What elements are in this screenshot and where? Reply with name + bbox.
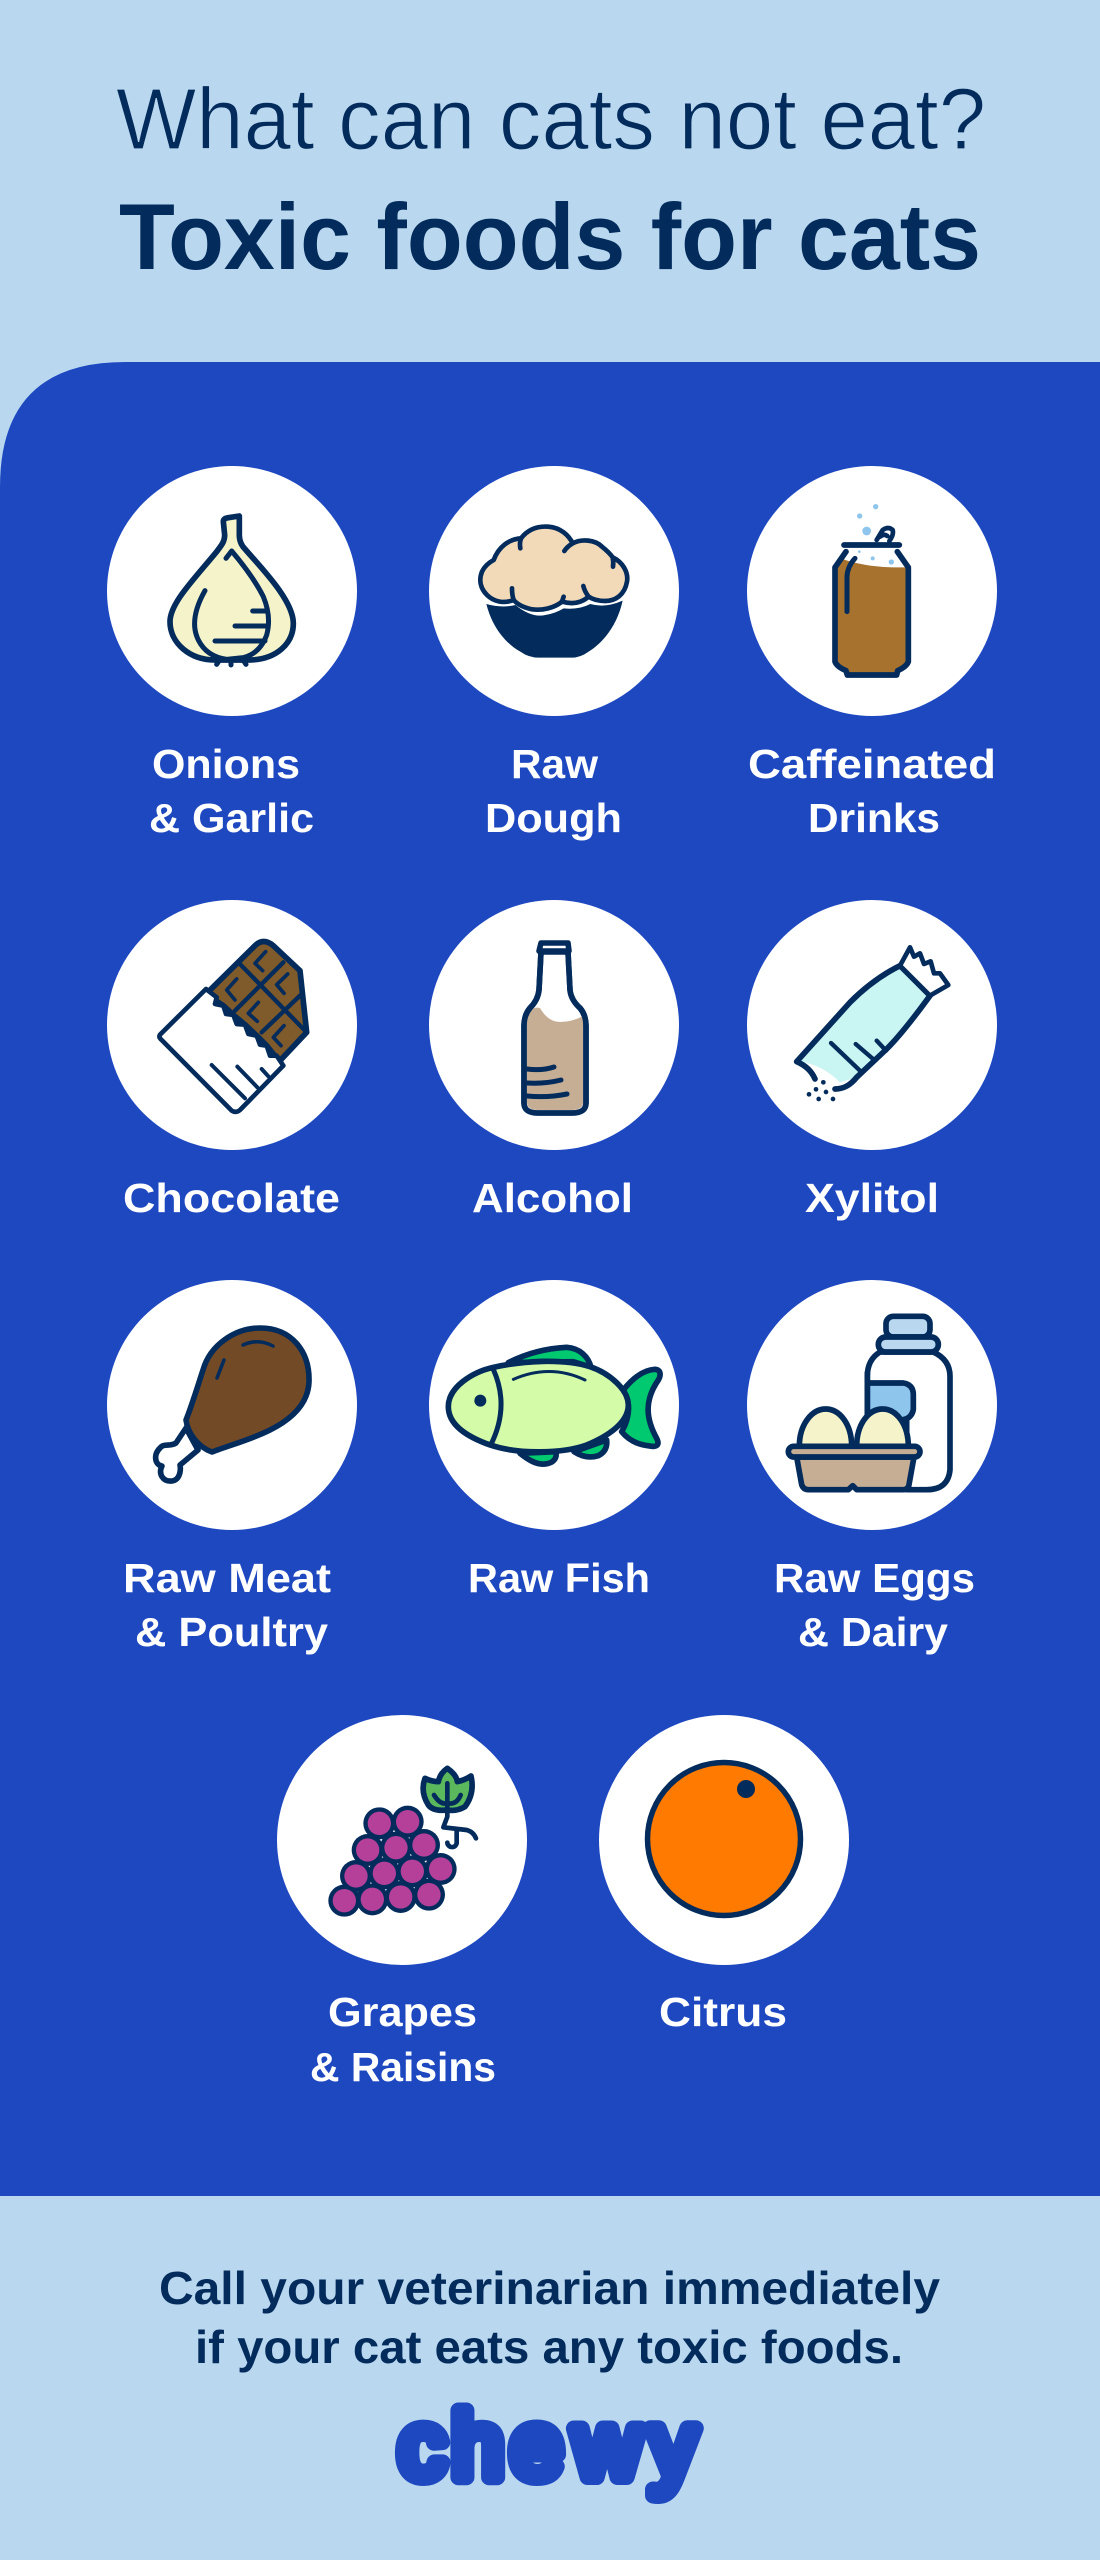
label: Raw Dough: Dough — [485, 795, 622, 841]
label: Citrus: Citrus — [659, 1989, 787, 2035]
label: Chocolate: Chocolate — [123, 1175, 340, 1221]
item: raw dough — [429, 466, 679, 841]
label: Onions & Garlic — [149, 741, 314, 841]
item: raw meat and poultry — [107, 1280, 357, 1655]
item: raw fish — [429, 1280, 679, 1601]
label: Grapes & Raisins — [310, 1989, 496, 2090]
icon: eggs and milk bottle — [788, 1316, 950, 1490]
title: What can cats not eat? — [116, 71, 986, 168]
callout: call your veterinarian: if your cat eats any toxic foods. — [195, 2321, 903, 2373]
label: Raw Eggs & Dairy: Raw Eggs — [774, 1555, 975, 1601]
panel: toxic foods — [0, 362, 1100, 2196]
item: raw eggs and dairy — [747, 1280, 997, 1655]
item: xylitol — [747, 900, 997, 1221]
label: Caffeinated Drinks — [748, 741, 996, 841]
item: alcohol — [429, 900, 679, 1221]
icon: chicken drumstick — [156, 1328, 309, 1481]
label: Raw Meat & Poultry — [123, 1555, 331, 1655]
icon: dough in bowl — [480, 527, 627, 658]
callout: call your veterinarian — [159, 2262, 940, 2373]
icon: soda can — [835, 504, 908, 675]
label: Raw Eggs & Dairy: & Dairy — [798, 1609, 948, 1655]
item: grapes and raisins — [277, 1715, 527, 2090]
label: Onions & Garlic: Onions — [152, 741, 300, 787]
title: Toxic foods for cats — [119, 184, 981, 289]
icon: grapes — [328, 1768, 476, 1917]
item: onions and garlic — [107, 466, 357, 841]
label: Raw Dough: Raw — [511, 741, 598, 787]
callout: call your veterinarian: Call your veterinarian immediately — [159, 2262, 940, 2314]
icon: beer bottle — [524, 943, 586, 1113]
item: caffeinated drinks — [747, 466, 997, 841]
logo: chewy: chewy — [399, 2395, 696, 2497]
icon: orange — [648, 1762, 800, 1916]
item: chocolate — [107, 900, 357, 1221]
label: Raw Fish: Raw Fish — [468, 1555, 650, 1601]
label: Raw Eggs & Dairy — [774, 1555, 975, 1655]
label: Grapes & Raisins: & Raisins — [310, 2044, 496, 2090]
item: citrus — [599, 1715, 849, 2035]
label: Onions & Garlic: & Garlic — [149, 795, 314, 841]
icon: garlic — [170, 516, 293, 665]
label: Grapes & Raisins: Grapes — [328, 1989, 477, 2035]
label: Caffeinated Drinks: Caffeinated — [748, 741, 996, 787]
label: Raw Meat & Poultry: Raw Meat — [123, 1555, 331, 1601]
label: Raw Meat & Poultry: & Poultry — [135, 1609, 328, 1655]
label: Raw Dough — [485, 741, 622, 841]
label: Xylitol: Xylitol — [805, 1175, 939, 1221]
icon: chocolate bar — [159, 941, 307, 1112]
icon: xylitol packet — [797, 947, 948, 1101]
label: Caffeinated Drinks: Drinks — [808, 795, 940, 841]
icon: fish — [448, 1347, 660, 1464]
label: Alcohol: Alcohol — [472, 1175, 633, 1221]
title — [116, 71, 986, 289]
